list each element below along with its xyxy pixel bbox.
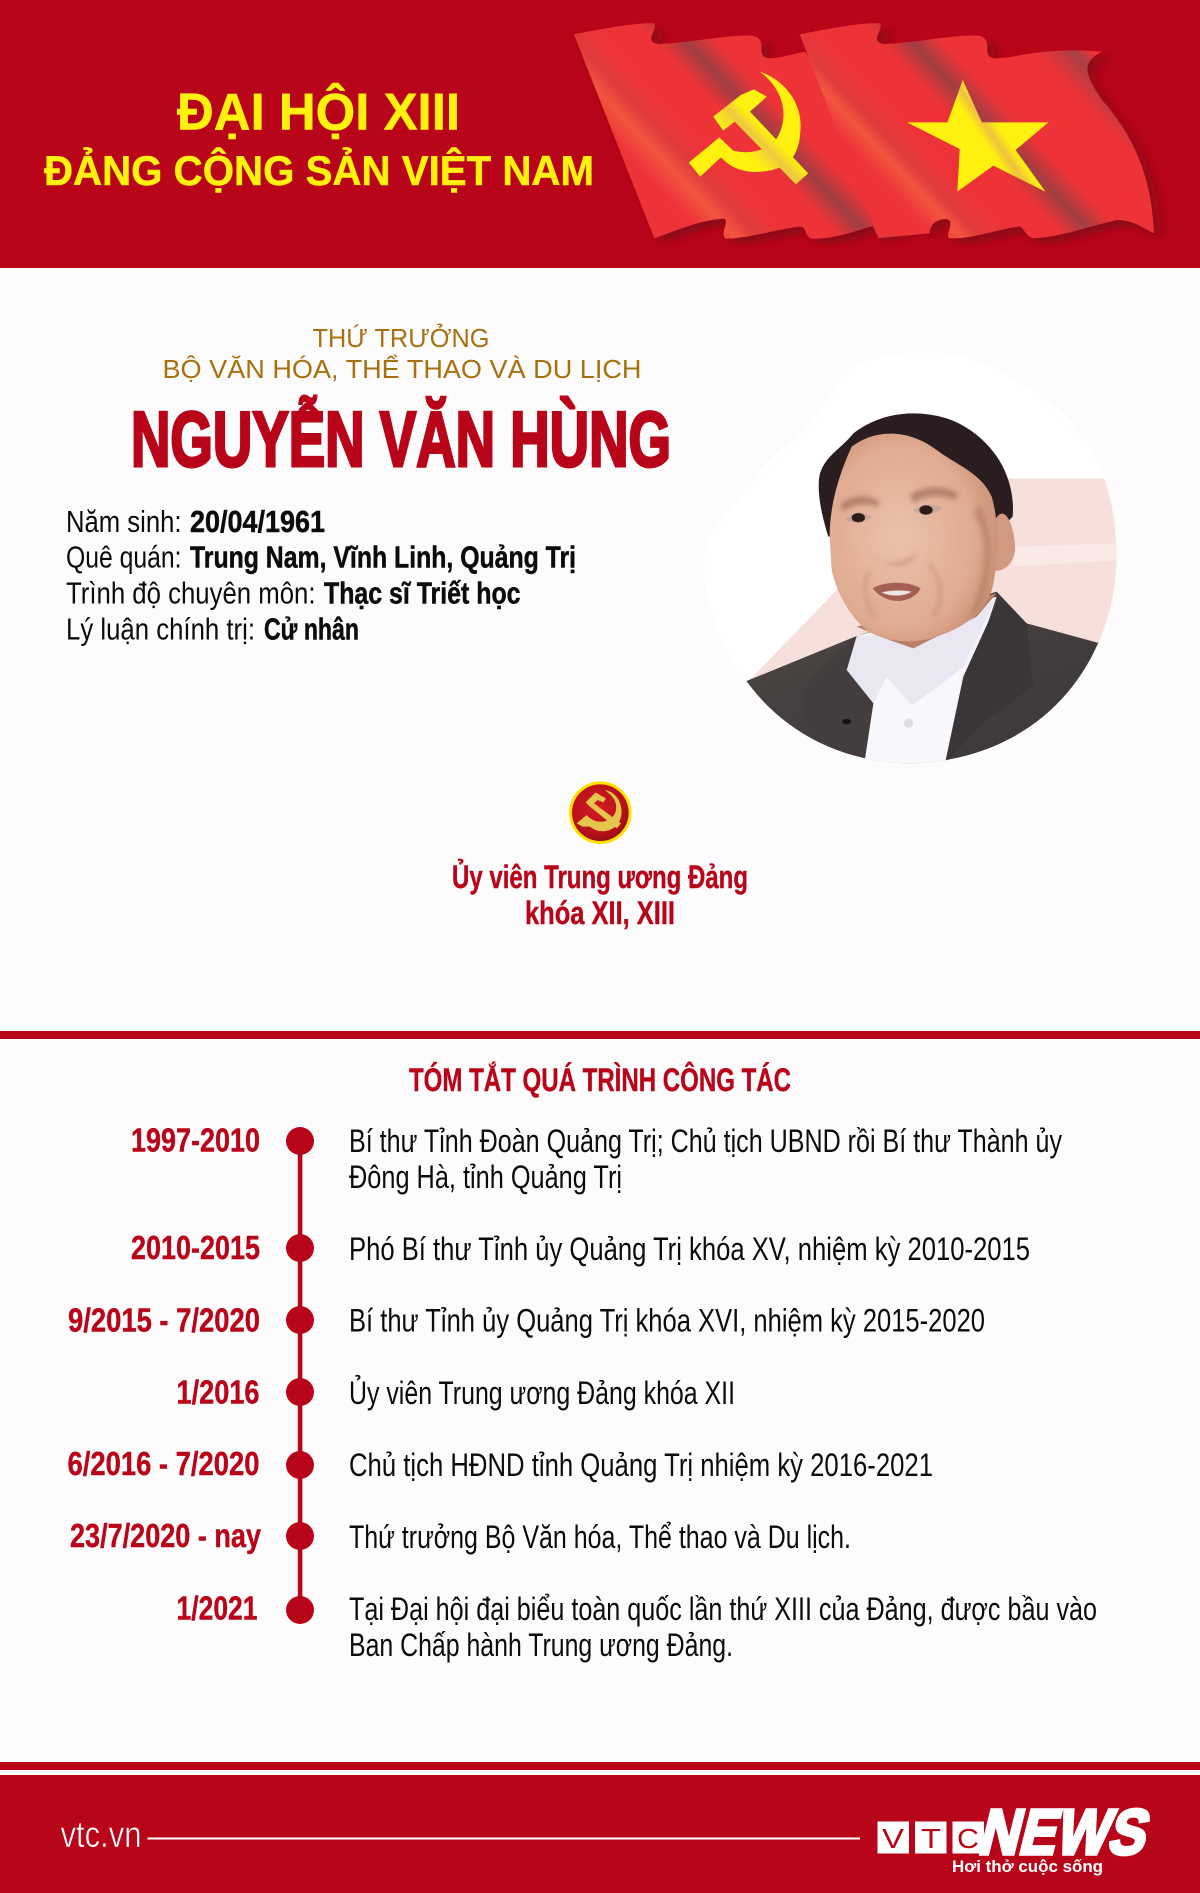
- jacket: [746, 592, 1098, 764]
- entry 2020-now: 23/7/2020 - nay: [70, 1517, 262, 1554]
- entry 2020-now: Thứ trưởng Bộ Văn hóa, Thể thao và Du lịch.: [349, 1519, 851, 1555]
- panel: footer: [0, 1775, 1200, 1893]
- entry 2020-now: [70, 1517, 851, 1555]
- entry 2016-2020: [68, 1445, 933, 1483]
- text: position: THỨ TRƯỞNG: [312, 322, 490, 353]
- entry 1/2016: [176, 1374, 735, 1411]
- entry 1/2021: 1/2021: [176, 1590, 258, 1626]
- eyes: [845, 513, 872, 523]
- flag: party flag: [574, 23, 930, 239]
- heading: career summary: TÓM TẮT QUÁ TRÌNH CÔNG TÁC: [409, 1062, 791, 1098]
- text: central committee member: Ủy viên Trung ương Đảng: [452, 859, 748, 895]
- entry 1997-2010: [131, 1122, 1062, 1195]
- entry 2015-2020: Bí thư Tỉnh ủy Quảng Trị khóa XVI, nhiệm kỳ 2015-2020: [349, 1302, 985, 1338]
- text block: personal details: Lý luận chính trị:: [66, 612, 255, 646]
- text: position: [162, 322, 642, 384]
- text: central committee member: khóa XII, XIII: [525, 895, 675, 931]
- entry 2016-2020: 6/2016 - 7/2020: [68, 1445, 260, 1482]
- portrait photo: [746, 413, 1116, 764]
- flag: national flag: [800, 23, 1154, 238]
- text: website: vtc.vn: [60, 1814, 142, 1855]
- entry 2010-2015: [131, 1229, 1030, 1267]
- heading: name: NGUYỄN VĂN HÙNG: [131, 395, 671, 483]
- entry 2016-2020: Chủ tịch HĐND tỉnh Quảng Trị nhiệm kỳ 2016-2021: [349, 1447, 933, 1483]
- timeline: career history: [68, 1122, 1097, 1663]
- entry 1/2021: Ban Chấp hành Trung ương Đảng.: [349, 1627, 733, 1663]
- text block: personal details: Thạc sĩ Triết học: [324, 576, 520, 610]
- collar: [847, 597, 997, 707]
- text block: personal details: 20/04/1961: [190, 504, 325, 539]
- entry 2010-2015: 2010-2015: [131, 1229, 260, 1266]
- entry 1/2016: Ủy viên Trung ương Đảng khóa XII: [349, 1375, 735, 1411]
- mouth: [873, 583, 921, 601]
- logo: VTC News: C: [957, 1823, 979, 1854]
- text block: personal details: Trung Nam, Vĩnh Linh, Quảng Trị: [190, 540, 576, 574]
- logo: VTC News: NEWS: [974, 1796, 1157, 1868]
- face: [830, 434, 997, 641]
- text block: personal details: [66, 504, 576, 646]
- timeline spine: [298, 1141, 302, 1610]
- jacket lapels: [945, 593, 1033, 763]
- text block: personal details: Năm sinh:: [66, 504, 182, 539]
- entry 1/2021: [176, 1590, 1097, 1663]
- text block: personal details: Trình độ chuyên môn:: [66, 576, 316, 610]
- neck shadow: [857, 593, 997, 648]
- icon: party emblem: [569, 781, 632, 844]
- logo: VTC News: V: [882, 1823, 904, 1854]
- logo: VTC News: T: [921, 1823, 941, 1854]
- logo: VTC News: Hơi thở cuộc sống: [952, 1857, 1103, 1876]
- logo: VTC News: [878, 1796, 1157, 1876]
- entry 1997-2010: Đông Hà, tỉnh Quảng Trị: [349, 1159, 622, 1195]
- hair: [819, 413, 1013, 537]
- face shading: [840, 487, 991, 620]
- icon: hammer and sickle: [689, 72, 808, 184]
- entry 2010-2015: Phó Bí thư Tỉnh ủy Quảng Trị khóa XV, nhiệm kỳ 2010-2015: [349, 1231, 1030, 1267]
- title: party name: ĐẢNG CỘNG SẢN VIỆT NAM: [44, 146, 594, 194]
- text: position: BỘ VĂN HÓA, THỂ THAO VÀ DU LỊCH: [162, 354, 642, 384]
- ear: [995, 514, 1015, 571]
- icon: waving flags: [574, 23, 1162, 245]
- entry 1997-2010: 1997-2010: [131, 1122, 260, 1158]
- text block: personal details: Cử nhân: [264, 612, 359, 646]
- entry 2015-2020: 9/2015 - 7/2020: [68, 1302, 260, 1338]
- icon: star: [907, 80, 1048, 192]
- entry 2015-2020: [68, 1302, 985, 1338]
- text: central committee member: [452, 859, 748, 931]
- entry 1/2016: 1/2016: [176, 1374, 260, 1410]
- shirt: [847, 597, 997, 770]
- panel: header banner: [0, 0, 1200, 268]
- text block: personal details: Quê quán:: [66, 540, 182, 574]
- title: congress: ĐẠI HỘI XIII: [177, 82, 460, 142]
